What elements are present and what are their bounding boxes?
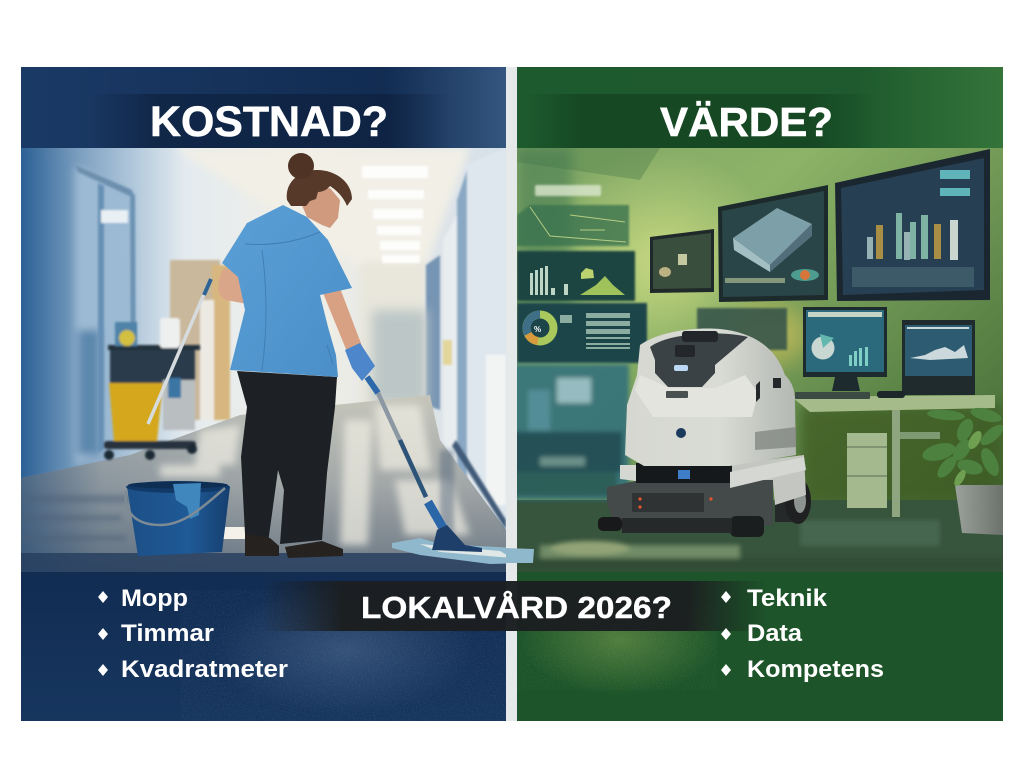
right arm <box>323 288 362 354</box>
potted plant <box>921 405 1007 535</box>
cloth <box>173 483 201 519</box>
wall monitor: bar chart <box>835 149 990 301</box>
center divider <box>506 67 517 721</box>
desk monitor: line chart <box>902 320 975 395</box>
data table <box>560 313 630 349</box>
mini bar chart <box>530 266 568 295</box>
bullet list: cost: Timmar <box>121 620 214 647</box>
holographic dashboard panels <box>510 185 787 500</box>
center banner: LOKALVÅRD 2026? <box>262 581 767 631</box>
light <box>674 365 688 371</box>
yellow bucket <box>109 383 163 441</box>
top sensor window <box>682 331 718 342</box>
blue lower panel <box>510 364 629 500</box>
donut chart <box>526 314 554 342</box>
center banner: LOKALVÅRD 2026?: LOKALVÅRD 2026? <box>361 590 672 625</box>
left glass wall <box>72 166 130 465</box>
office: wall and floor <box>517 148 1003 572</box>
corridor photo: background <box>0 140 506 572</box>
mop handle behind cart <box>148 279 211 424</box>
bullet list: cost <box>98 585 288 683</box>
header: KOSTNAD?: KOSTNAD? <box>150 98 388 146</box>
glove <box>345 343 375 381</box>
dark grey head mask <box>650 333 748 387</box>
wheel <box>775 478 811 524</box>
header: VÄRDE?: VÄRDE? <box>660 99 833 145</box>
trousers <box>237 371 337 544</box>
bullet list: value: Data <box>747 620 803 647</box>
bullet list: cost: Kvadratmeter <box>121 656 288 683</box>
footer background: cost side <box>21 572 506 721</box>
uniform shirt <box>222 205 352 377</box>
shoes <box>245 534 343 558</box>
desk monitor: pie chart <box>803 307 887 391</box>
holographic dashboard panels: % <box>534 325 541 334</box>
lower white body band <box>725 455 806 505</box>
wood door <box>170 260 230 420</box>
cleaning cart <box>104 318 200 460</box>
ceiling lights <box>362 166 428 263</box>
bullet list: value <box>721 585 884 683</box>
bullet list: value: Teknik <box>747 585 828 612</box>
mop head overlapping divider <box>506 548 534 563</box>
header: KOSTNAD? <box>21 67 506 148</box>
head and hair <box>287 153 352 228</box>
panel: VÄRDE (value, right side) <box>510 67 1007 721</box>
panel: KOSTNAD (cost, left side) <box>0 67 534 721</box>
reflective floor <box>21 395 506 572</box>
header: VÄRDE? <box>517 67 1003 148</box>
bumper <box>620 465 636 481</box>
bullet list: cost: Mopp <box>121 585 188 612</box>
desk with keyboard and drawers <box>792 391 995 517</box>
mop <box>367 377 534 564</box>
cleaning robot <box>598 329 811 537</box>
bullet list: value: Kompetens <box>747 656 884 683</box>
area chart <box>580 276 625 295</box>
blue bucket <box>126 481 230 556</box>
right wall <box>426 148 506 530</box>
wall monitor: 3D building plan <box>718 185 828 302</box>
cleaner in blue uniform <box>218 153 375 558</box>
footer background: value side <box>517 572 1003 721</box>
wall monitor: small map <box>650 229 714 293</box>
wireframe <box>530 207 626 242</box>
floor <box>517 500 1003 572</box>
base <box>607 480 773 530</box>
left arm <box>218 268 247 304</box>
white body shell <box>625 329 796 466</box>
